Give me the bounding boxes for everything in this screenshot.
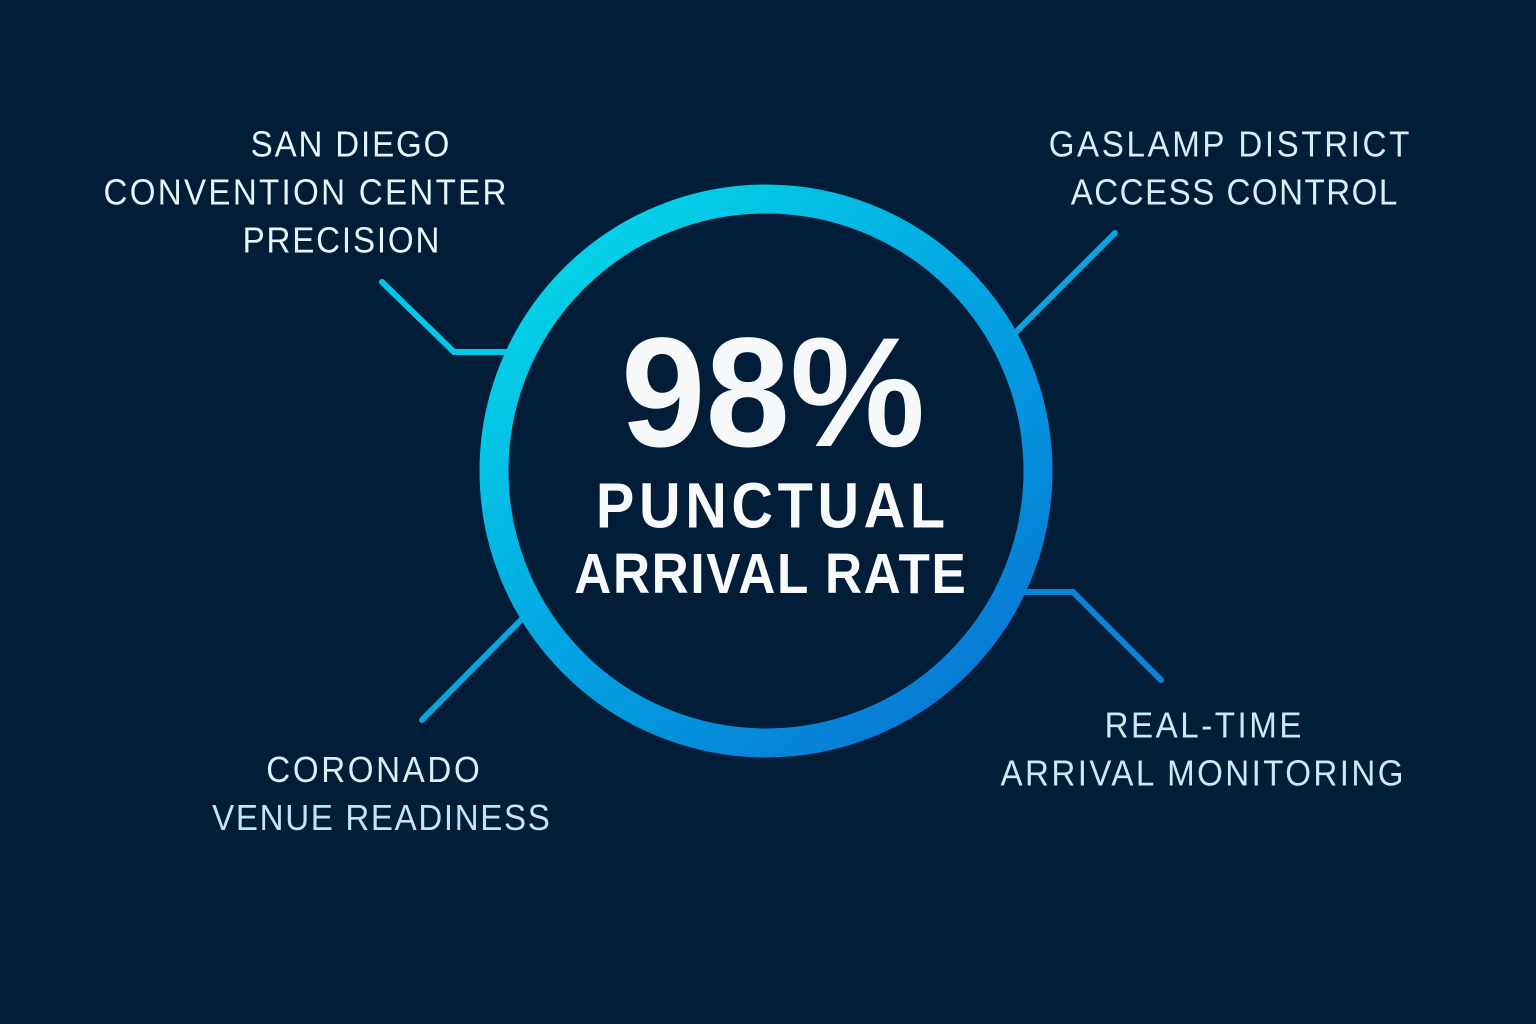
connector: top left xyxy=(382,282,510,352)
label: San Diego Convention Center Precision xyxy=(104,125,506,261)
label: Real-Time Arrival Monitoring: REAL-TIME xyxy=(1105,706,1301,746)
label: San Diego Convention Center Precision: SAN DIEGO xyxy=(251,125,449,165)
label: Gaslamp District Access Control: ACCESS CONTROL xyxy=(1071,173,1397,213)
headline: punctual arrival rate xyxy=(574,470,966,606)
label: Coronado Venue Readiness: CORONADO xyxy=(266,751,480,790)
label: Real-Time Arrival Monitoring: ARRIVAL MONITORING xyxy=(1001,754,1403,794)
connector: top right xyxy=(1016,233,1115,332)
headline: 98%: 98% xyxy=(621,306,925,480)
connector: bottom right xyxy=(1026,592,1161,680)
connector: bottom left xyxy=(422,618,523,720)
label: Gaslamp District Access Control xyxy=(1049,125,1409,213)
label: San Diego Convention Center Precision: CONVENTION CENTER xyxy=(104,173,506,213)
progress ring xyxy=(494,199,1038,743)
label: Coronado Venue Readiness xyxy=(212,751,550,838)
label: Gaslamp District Access Control: GASLAMP DISTRICT xyxy=(1049,125,1409,165)
label: Coronado Venue Readiness: VENUE READINESS xyxy=(212,799,550,838)
label: San Diego Convention Center Precision: PRECISION xyxy=(243,221,439,261)
headline: punctual arrival rate: PUNCTUAL xyxy=(596,470,945,541)
label: Real-Time Arrival Monitoring xyxy=(1001,706,1403,794)
headline: punctual arrival rate: ARRIVAL RATE xyxy=(574,543,966,606)
